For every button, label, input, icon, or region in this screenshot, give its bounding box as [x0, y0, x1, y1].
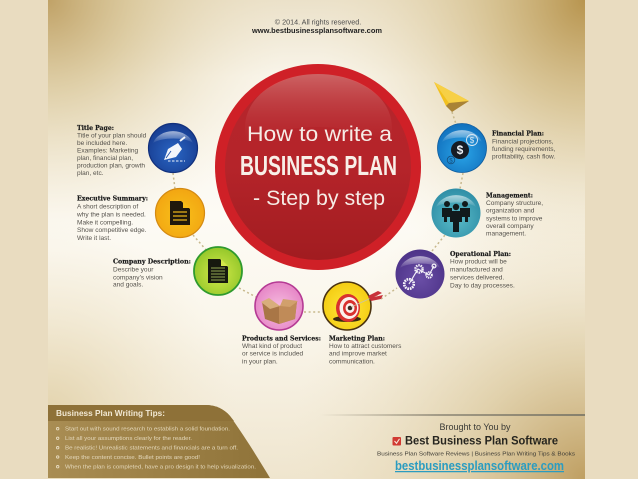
tips list: When the plan is completed, have a pro design it to help visualization. [65, 464, 256, 470]
text: management: management. [486, 230, 526, 237]
tips list [56, 426, 256, 470]
text: executive summary: Executive Summary: [77, 194, 148, 202]
text: company description: company's vision [113, 274, 163, 281]
icon: pen nib on blue circle [148, 124, 198, 172]
text: company description: and goals. [113, 282, 143, 289]
step: title page [77, 124, 198, 177]
text: products and services: Products and Services: [242, 335, 321, 343]
title text: - Step by step [253, 187, 385, 210]
icon: dollar coins on sky blue circle: $ [470, 136, 475, 145]
text: marketing plan [329, 335, 402, 365]
text: products and services: or service is included [242, 351, 303, 358]
copyright notice: www.bestbusinessplansoftware.com [251, 27, 382, 35]
copyright notice [251, 18, 382, 35]
text: title page [77, 124, 147, 177]
website link: bestbusinessplansoftware.com [395, 459, 564, 473]
icon: dollar coins on sky blue circle: $ [449, 158, 453, 164]
step: marketing plan [323, 282, 402, 365]
text: marketing plan: communication. [329, 358, 375, 365]
text: financial plan: Financial projections, [492, 139, 554, 146]
text: executive summary: A short description of [77, 204, 138, 211]
text: title page: Examples: Marketing [77, 148, 138, 154]
text: financial plan [492, 130, 556, 160]
icon: document on orange circle [156, 188, 204, 238]
panel: brought to you by: Business Plan Software Reviews | Business Plan Writing Tips & Books [377, 451, 575, 457]
icon: target with arrow on yellow circle [323, 282, 383, 330]
tips list: List all your assumptions clearly for the reader. [65, 436, 192, 442]
text: company description [113, 258, 191, 289]
text: executive summary: Make it compelling. [77, 220, 133, 226]
text: title page: plan, etc. [77, 170, 104, 177]
icon: cardboard box on pink circle [255, 282, 303, 330]
text: operational plan: manufactured and [450, 267, 503, 274]
copyright notice: © 2014. All rights reserved. [275, 18, 361, 26]
tips list: Start out with sound research to establish a solid foundation. [65, 426, 230, 432]
step: operational plan [396, 250, 515, 298]
step: financial plan [438, 124, 556, 172]
text: operational plan [450, 250, 515, 290]
text: products and services: in your plan. [242, 358, 278, 365]
panel: brought to you by: Best Business Plan Software [405, 436, 558, 448]
text: company description: Company Description: [113, 258, 191, 266]
step: management [432, 188, 543, 238]
text: marketing plan: Marketing Plan: [329, 335, 385, 343]
text: operational plan: Day to day processes. [450, 283, 515, 290]
text: executive summary: why the plan is needed. [76, 212, 146, 218]
text: management: systems to improve [486, 215, 543, 222]
panel: brought to you by: Brought to You by [439, 422, 511, 432]
panel: brought to you by [377, 422, 575, 457]
tips list: Be realistic! Unrealistic statements and financials are a turn off. [65, 446, 238, 452]
icon: gears on purple circle [396, 250, 444, 298]
main title circle [215, 64, 421, 270]
text: operational plan: How product will be [450, 259, 507, 266]
text: financial plan: profitability, cash flow. [492, 153, 555, 160]
step: products and services [242, 282, 321, 365]
text: operational plan: Operational Plan: [450, 250, 511, 258]
icon: list document on green circle [194, 247, 242, 295]
step: company description [113, 247, 242, 295]
title text [240, 123, 397, 210]
step: executive summary [76, 188, 204, 242]
icon: yellow paper plane [434, 82, 469, 112]
text: products and services: What kind of product [242, 343, 302, 350]
panel: writing tips [48, 405, 270, 478]
text: management: overall company [486, 223, 534, 230]
text: marketing plan: How to attract customers [329, 343, 402, 350]
text: executive summary: Show competitive edge. [77, 227, 147, 234]
text: operational plan: services delivered. [450, 275, 504, 282]
text: title page: production plan, growth [77, 162, 145, 170]
text: title page: plan, financial plan, [77, 155, 133, 162]
icon: dollar coins on sky blue circle: $ [457, 143, 464, 157]
text: financial plan: Financial Plan: [492, 130, 544, 138]
tips heading band [48, 405, 234, 421]
text: title page: Title Page: [77, 124, 114, 132]
dotted connector path [173, 112, 463, 312]
divider rule [320, 414, 585, 416]
tips heading band: Business Plan Writing Tips: [56, 408, 165, 418]
text: title page: Title of your plan should [77, 132, 147, 140]
text: management: organization and [486, 208, 535, 215]
icon: red checkbox [392, 437, 401, 446]
title text: BUSINESS PLAN [240, 150, 397, 181]
text: management [486, 191, 543, 237]
text: products and services [242, 335, 321, 365]
text: marketing plan: and improve market [329, 351, 387, 358]
text: executive summary [76, 194, 148, 242]
icon: dollar coins on sky blue circle [438, 124, 486, 172]
text: title page: be included here. [77, 140, 127, 147]
text: executive summary: Write it last. [77, 235, 111, 242]
text: financial plan: funding requirements, [492, 146, 556, 153]
title text: How to write a [247, 123, 392, 146]
text: management: Company structure, [486, 200, 543, 207]
text: company description: Describe your [113, 267, 154, 274]
icon: team silhouettes on teal circle [432, 188, 480, 238]
tips list: Keep the content concise. Bullet points are good! [65, 455, 200, 461]
text: management: Management: [486, 191, 533, 199]
